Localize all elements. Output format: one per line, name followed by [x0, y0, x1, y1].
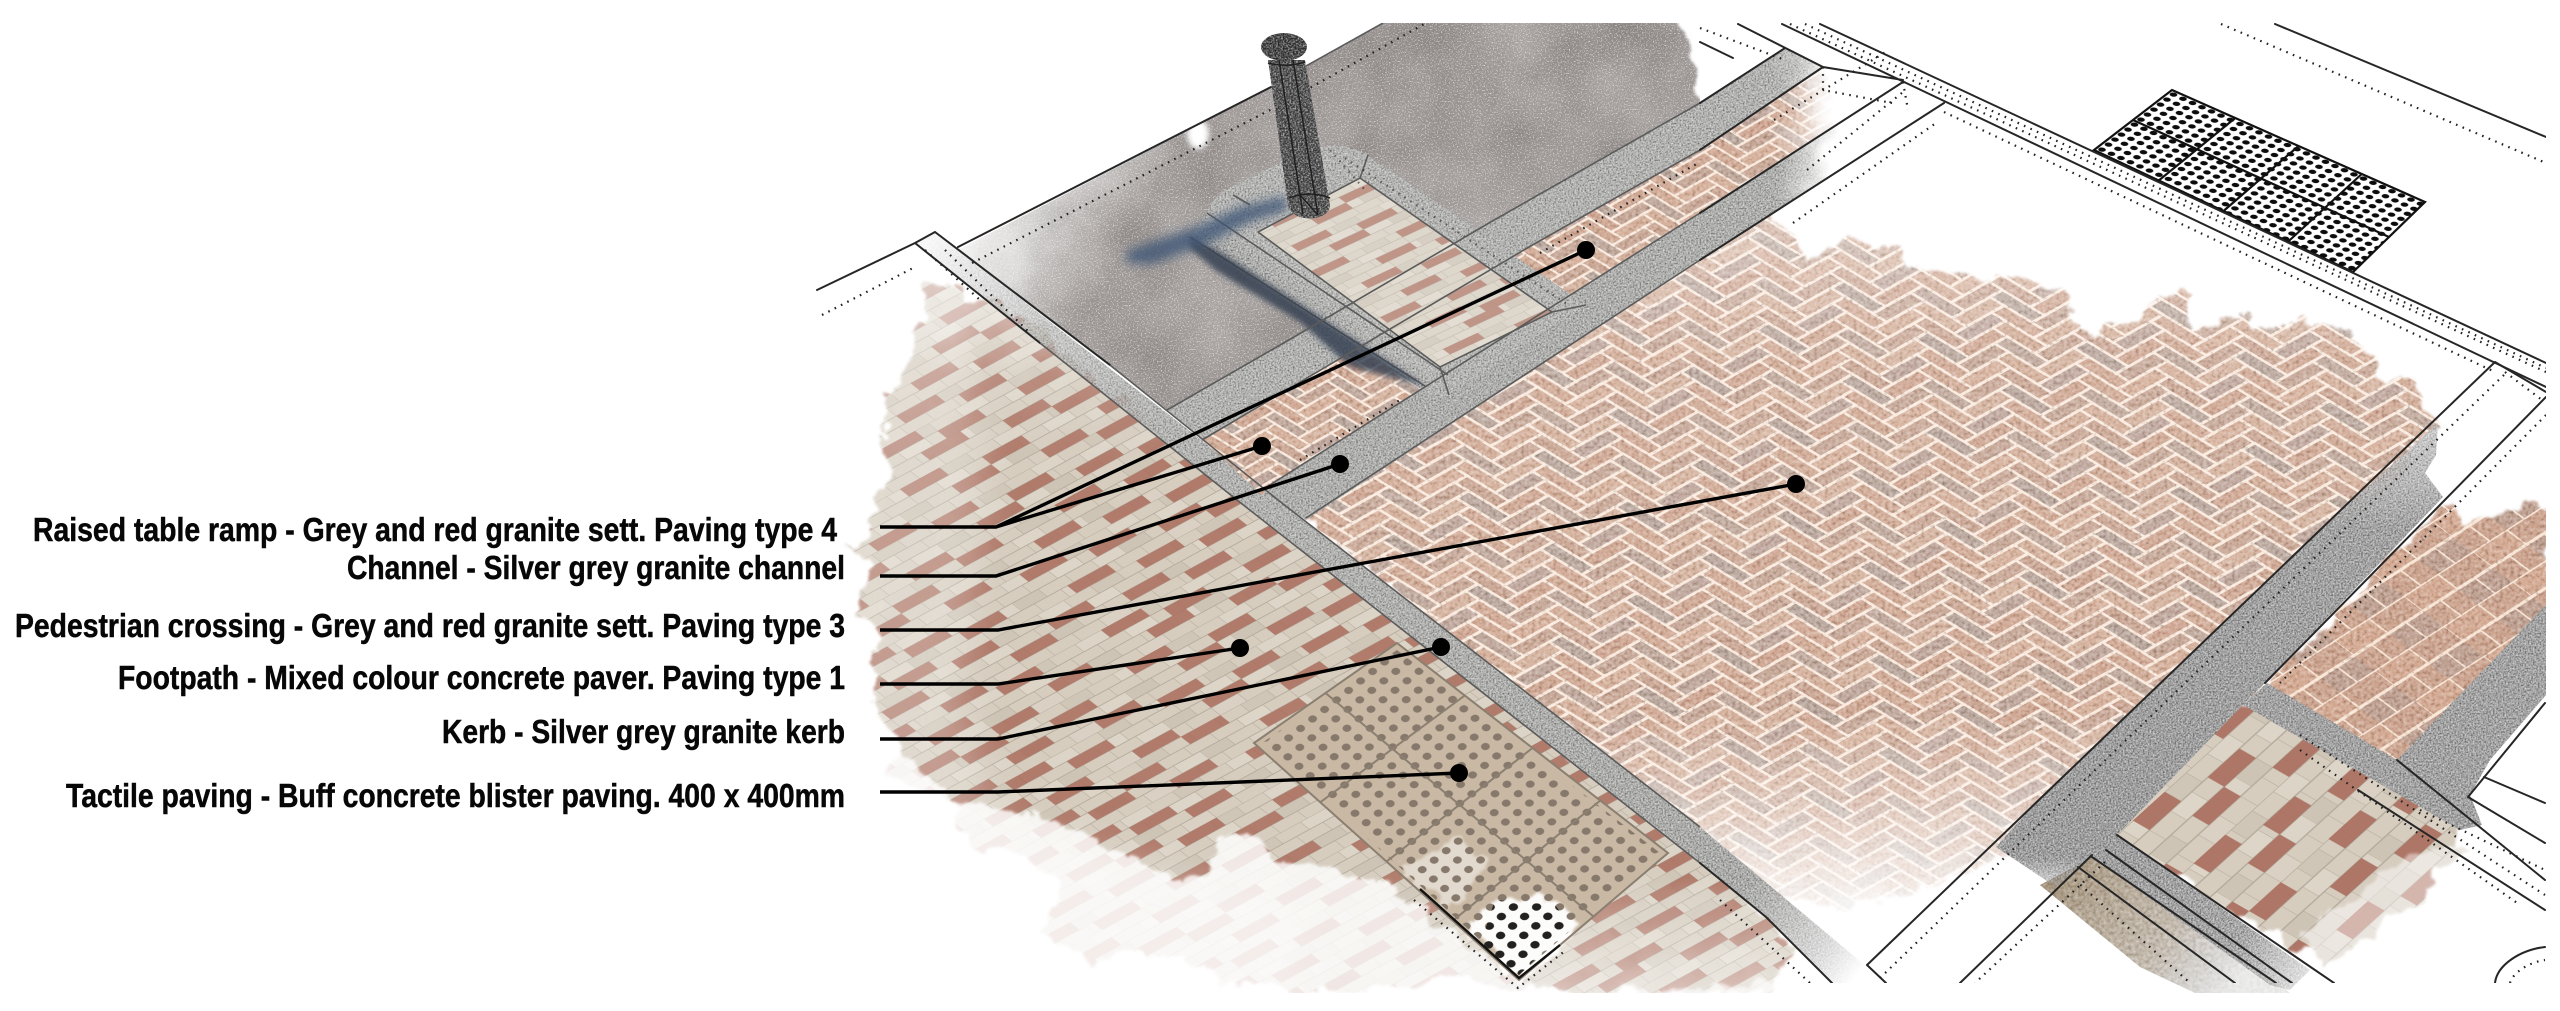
bollard shaft	[1268, 60, 1330, 219]
shadow of bollard	[1125, 196, 1288, 265]
label: kerb: Kerb - Silver grey granite kerb	[442, 713, 845, 750]
linework: road edges and dotted offsets	[817, 23, 2546, 983]
label: tactile paving: Tactile paving - Buff concrete blister paving. 400 x 400mm	[66, 777, 845, 814]
leader: footpath	[880, 639, 1249, 684]
leader: pedestrian crossing	[880, 475, 1805, 630]
tactile base	[1254, 643, 1668, 980]
tactile white wash patches	[1395, 842, 1578, 985]
ramp side face	[1210, 232, 1294, 296]
tree pit granite frame	[1190, 146, 1586, 395]
tactile grid	[1254, 643, 1668, 980]
leader: kerb	[880, 638, 1450, 739]
panel: right stretcher bond paving	[2250, 499, 2546, 760]
panel: lower granite band	[2092, 835, 2310, 990]
bollard cap	[1261, 33, 1307, 61]
small white gap in wash	[1187, 119, 1209, 149]
material labels	[15, 511, 845, 814]
label: channel: Channel - Silver grey granite channel	[347, 549, 845, 586]
panel: sand coloured verge	[2040, 857, 2290, 993]
panel: tactile paving buff blister tiles	[1254, 643, 1668, 988]
panel: kerb silver grey granite	[915, 232, 1886, 983]
shadow of ramp	[1190, 237, 1425, 386]
panel: pedestrian crossing herringbone paving	[1302, 215, 2442, 911]
panel: cross channel granite	[2243, 605, 2546, 830]
panel: right granite band	[1996, 423, 2443, 887]
leader lines and dots	[880, 241, 1805, 792]
leader: channel	[880, 455, 1349, 576]
label: footpath: Footpath - Mixed colour concrete paver. Paving type 1	[118, 659, 845, 696]
panel: top right black tactile tiles	[2094, 90, 2425, 272]
tactile blister dots	[1262, 650, 1660, 975]
leader: raised table ramp	[880, 241, 1595, 527]
label: pedestrian crossing: Pedestrian crossing - Grey and red granite sett. Paving type 3	[15, 607, 845, 644]
panel: dark grey raised table	[940, 20, 1720, 420]
panel: raised table ramp strip and channel	[1168, 49, 1836, 520]
tree pit cream and red setts	[1258, 178, 1552, 367]
label: raised table ramp: Raised table ramp - Grey and red granite sett. Paving type 4	[33, 511, 838, 548]
panel: granite band	[1167, 48, 1823, 440]
leader: tactile paving	[880, 764, 1468, 792]
bollard	[1261, 33, 1330, 219]
panel: channel silver grey granite	[1263, 128, 1836, 520]
axonometric paving drawing	[800, 20, 2560, 1011]
panel: footpath mixed colour concrete pavers	[844, 281, 1796, 993]
panel: lower right cream crossing	[2112, 705, 2470, 967]
panel: herringbone strip	[1202, 69, 1832, 495]
panel: tree pit raised table	[1190, 146, 1586, 395]
